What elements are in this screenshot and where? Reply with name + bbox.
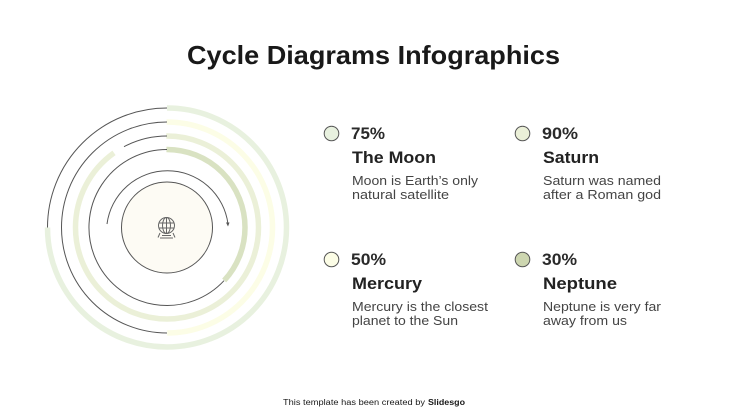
heading: Neptune [543, 274, 617, 293]
item: Neptune [515, 250, 662, 328]
footer credit: This template has been created by [283, 398, 425, 407]
ring: 30% Neptune [89, 149, 245, 306]
description [352, 299, 488, 328]
heading: Saturn [543, 148, 599, 167]
description: Saturn was named [543, 173, 661, 188]
description: Neptune is very far [543, 299, 662, 314]
heading: Mercury [352, 274, 423, 293]
description [543, 173, 661, 202]
marker [515, 252, 530, 267]
description: away from us [543, 313, 628, 328]
description: Mercury is the closest [352, 299, 488, 314]
description: after a Roman god [543, 187, 661, 202]
description: natural satellite [352, 187, 449, 202]
heading: The Moon [352, 148, 436, 167]
percentage: 75% [351, 124, 385, 143]
description: planet to the Sun [352, 313, 458, 328]
item: Mercury [324, 250, 488, 328]
percentage: 30% [542, 250, 577, 269]
icon: globe [158, 218, 175, 238]
title: Cycle Diagrams Infographics [187, 40, 560, 70]
percentage: 50% [351, 250, 386, 269]
item: Saturn [515, 124, 661, 202]
marker [515, 126, 530, 141]
ring: 75% Moon [48, 108, 286, 347]
item: The Moon [324, 124, 479, 202]
arrow arc [107, 171, 230, 226]
footer credit [283, 398, 465, 407]
footer credit: Slidesgo [428, 398, 465, 407]
marker [324, 252, 339, 267]
percentage: 90% [542, 124, 578, 143]
ring: 90% Saturn [76, 136, 258, 319]
description: Moon is Earth’s only [352, 173, 479, 188]
cycle diagram [48, 108, 286, 347]
marker [324, 126, 339, 141]
description [352, 173, 479, 202]
center circle [122, 182, 212, 273]
ring: 50% Mercury [62, 122, 272, 333]
description [543, 299, 662, 328]
